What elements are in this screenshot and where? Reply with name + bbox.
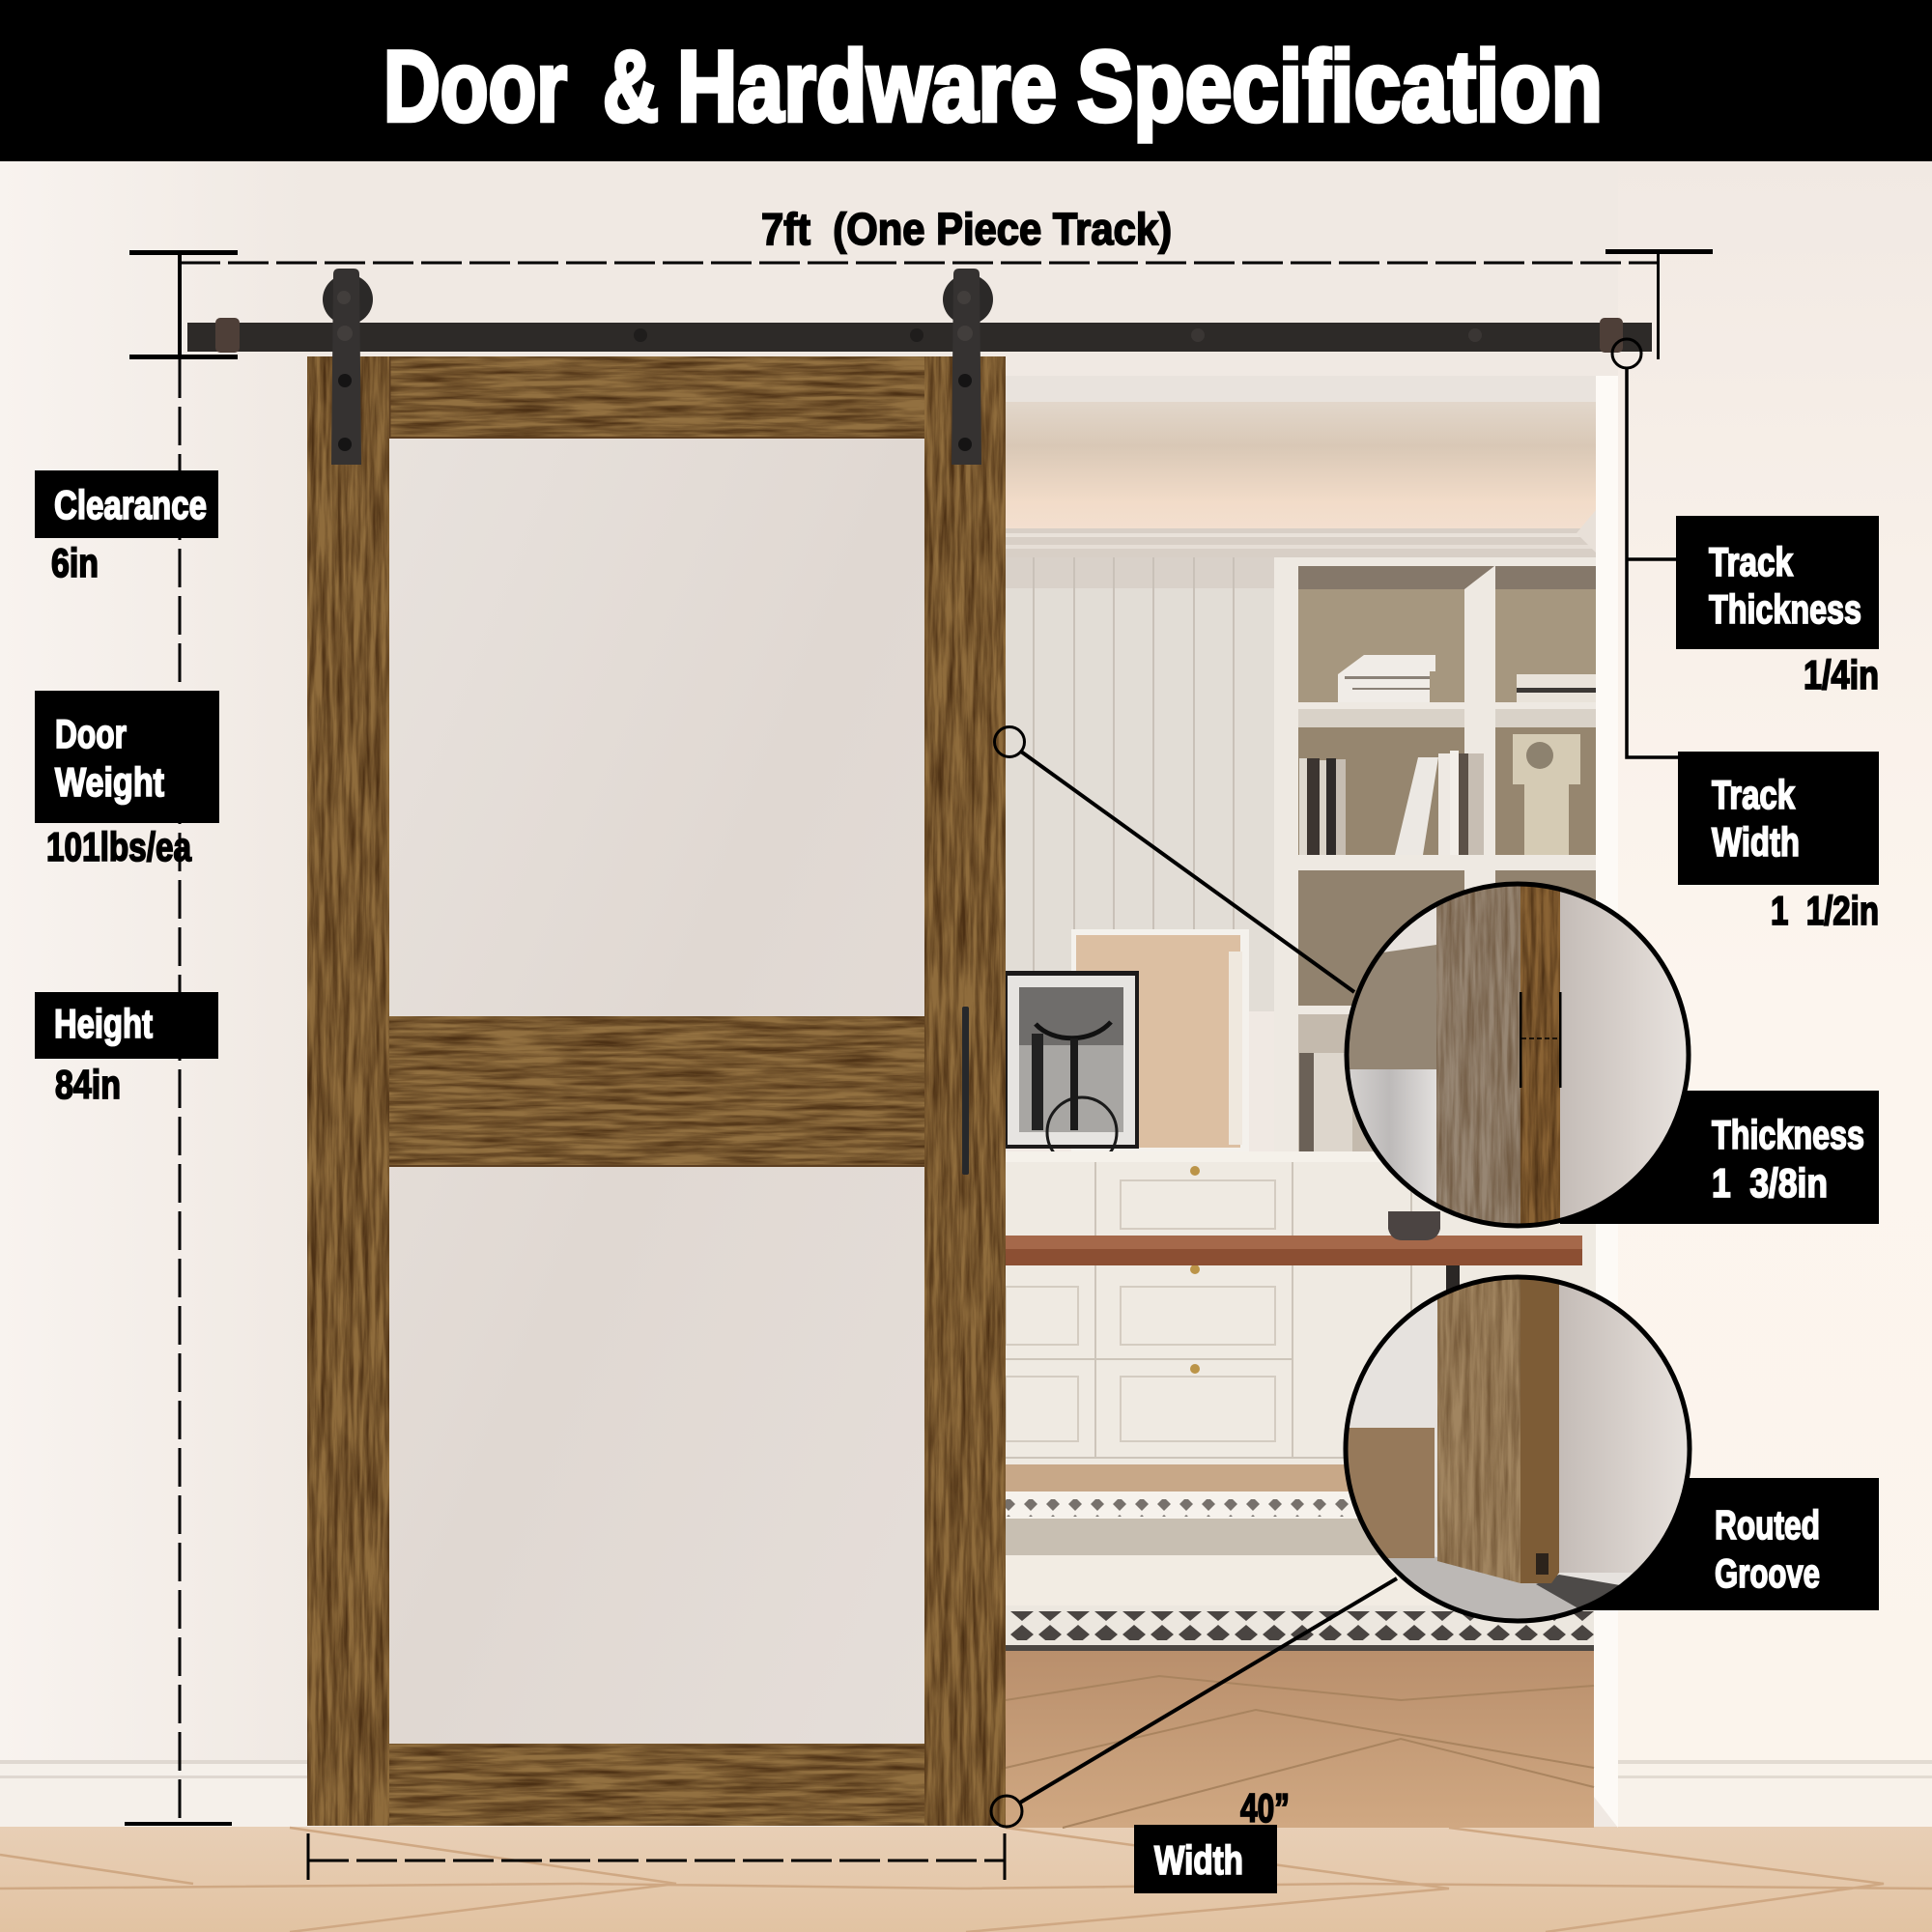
stacked books and objects (1299, 655, 1596, 1159)
label: track thickness: 1/4in (1804, 652, 1879, 697)
lit ceiling (1006, 402, 1596, 528)
title banner: & (603, 31, 659, 143)
label: clearance (35, 470, 218, 585)
hanger strap: right (943, 269, 993, 465)
hanger strap: left (323, 269, 373, 465)
label: track thickness: Thickness (1709, 586, 1861, 632)
floor (0, 1827, 1932, 1932)
door glass panel (389, 439, 924, 1744)
label: door width (1134, 1785, 1290, 1893)
leader: groove marker to detail circle (991, 1578, 1397, 1827)
label: routed groove: Routed (1715, 1502, 1820, 1548)
door height dimension (125, 359, 232, 1826)
label: door weight: Door (55, 711, 127, 756)
door right stile (924, 356, 1006, 1826)
label: door weight: Weight (55, 759, 164, 805)
barn door (307, 356, 1006, 1826)
label: height (35, 992, 218, 1107)
table top (1006, 1236, 1582, 1304)
label: thickness: 1 3/8in (1712, 1160, 1828, 1206)
door bottom rail (389, 1744, 924, 1826)
title banner: Hardware (677, 31, 1057, 143)
track length dimension (129, 204, 1713, 359)
panelled wall (1006, 557, 1274, 1014)
label: height: Height (54, 1001, 153, 1046)
label: track width (1678, 752, 1879, 933)
crown moulding (1006, 510, 1596, 557)
label: clearance: Clearance (54, 482, 207, 527)
label: track thickness: Track (1709, 539, 1794, 584)
label: track width: 1 1/2in (1771, 888, 1879, 933)
detail circle: routed groove (1343, 1273, 1700, 1628)
door left stile (307, 356, 389, 1826)
baseboard: right (1618, 1760, 1932, 1828)
door handle (962, 1007, 969, 1175)
label: track width: Width (1712, 819, 1800, 865)
label: routed groove (1584, 1478, 1879, 1610)
title banner: Specification (1077, 31, 1603, 143)
door opening trim (1006, 376, 1618, 1828)
label: thickness: Thickness (1712, 1112, 1864, 1157)
sliding track (187, 318, 1652, 353)
leader: thickness marker to detail circle (995, 726, 1354, 992)
title banner: Door (384, 31, 567, 143)
interior floor and rug (1006, 1464, 1594, 1828)
detail circle: door thickness (1343, 879, 1695, 1234)
label: clearance: 6in (51, 540, 99, 585)
track length label: 7ft (One Piece Track) (761, 204, 1172, 254)
leader lines: track callouts (1612, 339, 1678, 757)
framed art: bicycle photo (1006, 971, 1139, 1167)
door width dimension (307, 1833, 1007, 1880)
door top rail (389, 356, 924, 439)
label: track thickness (1676, 516, 1879, 697)
cup on table (1388, 1211, 1440, 1240)
label: thickness (1560, 1091, 1879, 1224)
title banner (0, 0, 1932, 161)
label: height: 84in (55, 1062, 121, 1107)
label: routed groove: Groove (1715, 1550, 1820, 1596)
baseboard: left (0, 1760, 307, 1828)
cabinet drawers (1006, 1151, 1596, 1464)
label: track width: Track (1712, 772, 1795, 817)
room seen through the doorway (1006, 376, 1618, 1828)
framed art: canvas (1071, 929, 1249, 1151)
bookshelf (1274, 557, 1596, 1176)
label: door width: Width (1154, 1837, 1243, 1883)
clearance dimension bracket (129, 254, 238, 359)
door middle rail (389, 1016, 924, 1167)
label: door weight: 101lbs/ea (46, 824, 191, 869)
label: door width: 40” (1240, 1785, 1290, 1831)
label: door weight (35, 691, 219, 869)
